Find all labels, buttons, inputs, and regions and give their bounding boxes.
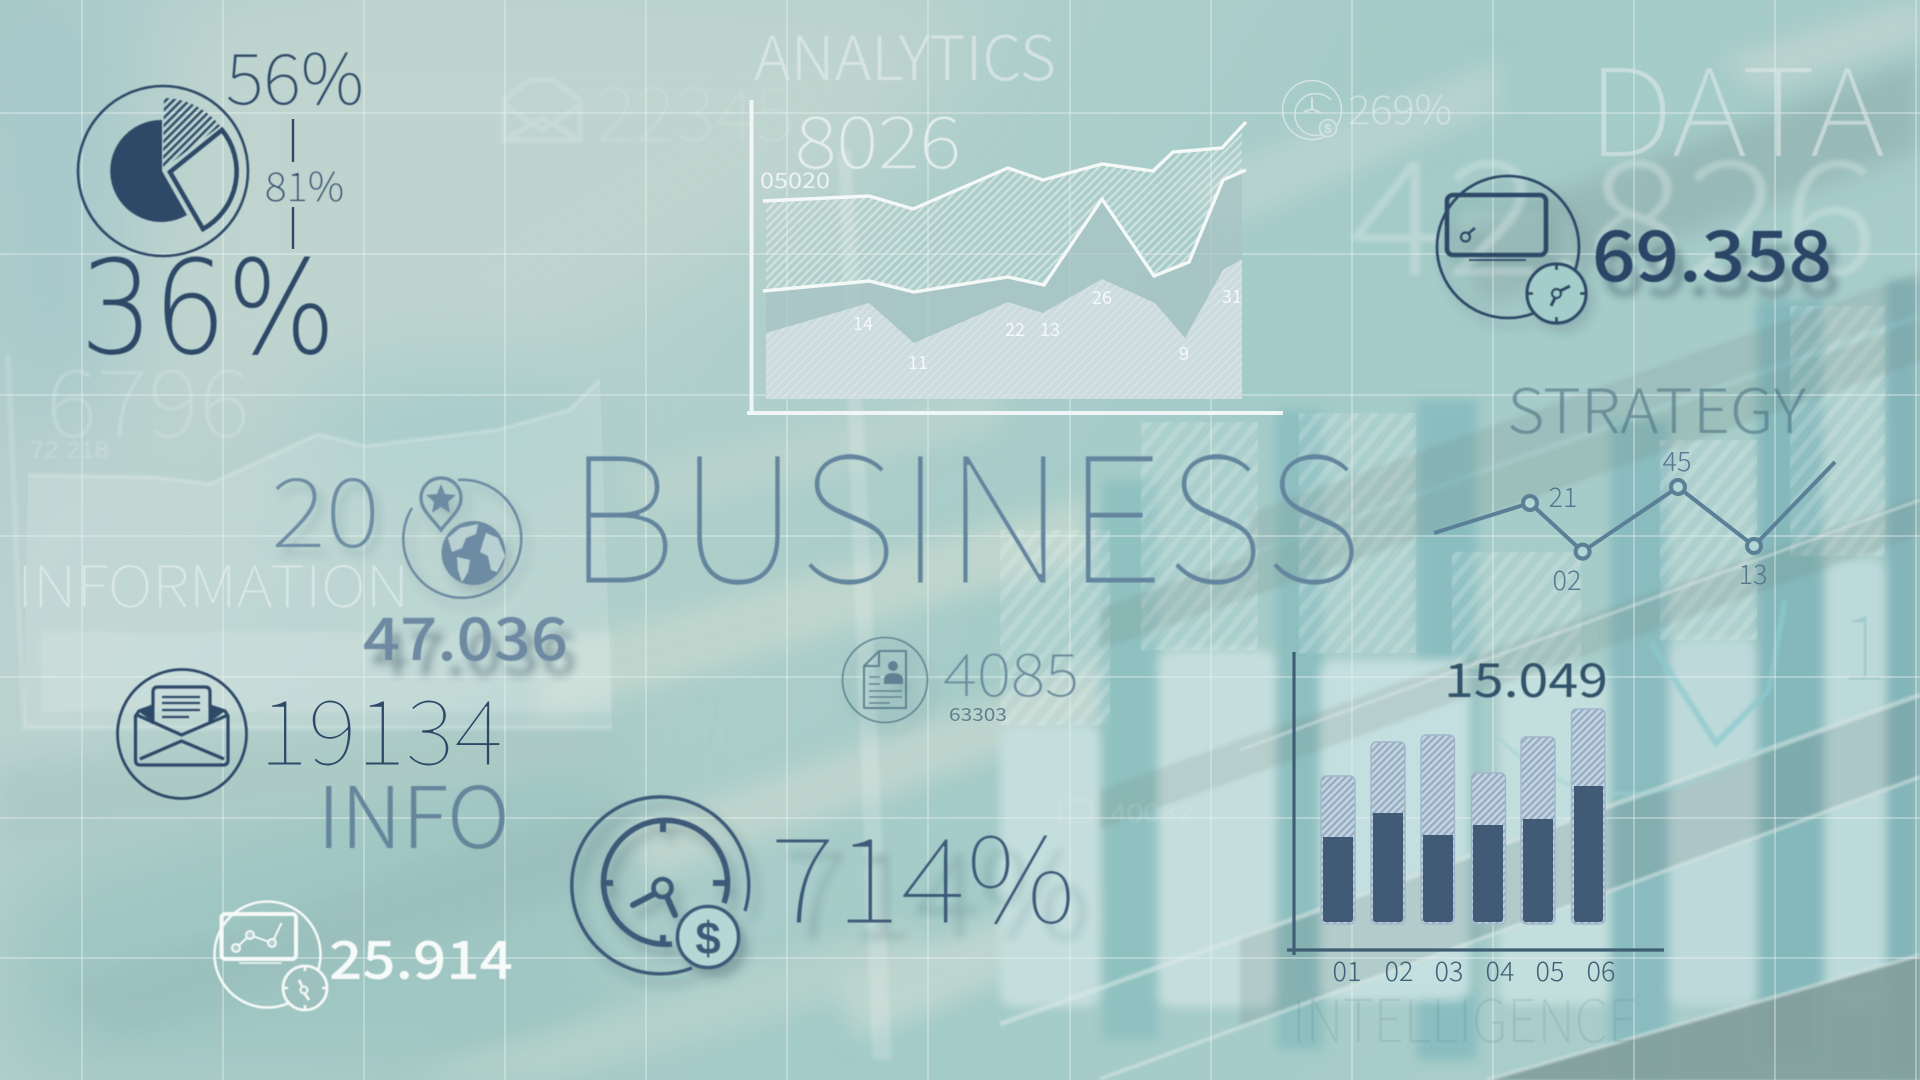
data labels: 13 (1040, 316, 1060, 342)
bar chart (1287, 642, 1664, 989)
stat: 4085: 4085 (943, 628, 1079, 713)
stat: 47.036: 47.036 (363, 592, 568, 677)
stat: 25.914: 25.914 (329, 919, 513, 995)
faded number 72 218: 72 218 (30, 437, 109, 464)
faded word: INTELLIGENCE: INTELLIGENCE (1292, 974, 1638, 1059)
stat: 269%: 269% (1348, 78, 1452, 136)
panel: pie chart stats (78, 24, 364, 384)
faded background panel: left chart (8, 329, 612, 728)
data labels (853, 283, 1242, 375)
stat: 69.358: 69.358 (1592, 201, 1832, 302)
data labels: 31 (1222, 283, 1242, 309)
bar 01 (1321, 776, 1355, 924)
strategy labels (1549, 440, 1767, 598)
faded number 42.826: 42.826 (1348, 90, 1879, 322)
icon: large clock with dollar (572, 797, 749, 974)
stat: 36%: 36% (80, 232, 336, 384)
bar chart labels (1333, 950, 1615, 989)
icon: large clock with dollar: $ (695, 912, 721, 964)
bar chart labels: 02 (1385, 950, 1413, 989)
icon: globe with pin (403, 478, 521, 598)
icon: resume document (842, 638, 928, 722)
stat: 20: 20 (271, 436, 380, 575)
stat: 714%: 714% (770, 786, 1076, 958)
strategy labels: 45 (1663, 440, 1691, 479)
bar 03 (1421, 735, 1454, 924)
icon: monitor with clock (1437, 176, 1586, 323)
heading: INFO: INFO (317, 750, 510, 873)
faded envelope with 22345: 22345 (596, 54, 794, 163)
number 8026: 8026 (795, 84, 961, 189)
data labels: 11 (908, 349, 928, 375)
bar chart axes (1287, 652, 1664, 955)
bar 02 (1371, 742, 1405, 924)
chart axes (747, 100, 1283, 415)
bar chart labels: 01 (1333, 950, 1361, 989)
divider lines (292, 119, 294, 249)
bar chart labels: 04 (1486, 950, 1514, 989)
data labels: 22 (1005, 316, 1025, 342)
bar 06 (1572, 709, 1605, 924)
icon: faded clock with dollar (1282, 80, 1342, 140)
strategy labels: 21 (1549, 476, 1577, 515)
data labels: 9 (1179, 340, 1189, 366)
stat: 15.049: 15.049 (1444, 642, 1608, 711)
bar chart labels: 06 (1587, 950, 1615, 989)
line chart: strategy (1434, 440, 1835, 598)
stat: 19134: 19134 (259, 660, 503, 792)
heading: DATA: DATA (1587, 16, 1885, 191)
icon: pie chart (78, 86, 248, 256)
area: hatched band (766, 126, 1242, 292)
faded heading: INFORMATION: INFORMATION (17, 542, 409, 624)
stat: 56%: 56% (226, 24, 364, 125)
background bar columns: 1 (1840, 576, 1887, 706)
icon: white chart monitor with clock (214, 902, 327, 1010)
icon: open envelope (118, 670, 246, 798)
faded number 6796: 6796 (46, 329, 250, 465)
area: dark band (766, 172, 1242, 343)
heading: ANALYTICS: ANALYTICS (754, 9, 1056, 98)
stat: 81%: 81% (265, 155, 344, 213)
number 05020: 05020 (760, 165, 830, 195)
faded small envelope with number: 40082 (1110, 798, 1194, 828)
background bar columns (1000, 272, 1920, 1080)
area: lower light area (766, 259, 1242, 399)
bar chart labels: 05 (1536, 950, 1564, 989)
bar chart labels: 03 (1435, 950, 1463, 989)
icon: faded clock with dollar: $ (1324, 121, 1332, 136)
title: BUSINESS: BUSINESS (566, 381, 1363, 634)
bar 05 (1521, 737, 1555, 924)
bar 04 (1472, 773, 1506, 924)
stat: 63303: 63303 (949, 701, 1007, 727)
faded envelope with 22345 (504, 54, 794, 163)
panel: analytics area chart (747, 9, 1283, 415)
heading: STRATEGY: STRATEGY (1507, 362, 1806, 451)
strategy labels: 02 (1553, 559, 1581, 598)
data labels: 14 (853, 310, 873, 336)
light vertical streak (838, 150, 892, 1060)
chart lines (763, 122, 1246, 292)
strategy labels: 13 (1739, 553, 1767, 592)
faded small envelope with number (1060, 798, 1194, 828)
data labels: 26 (1092, 284, 1112, 310)
